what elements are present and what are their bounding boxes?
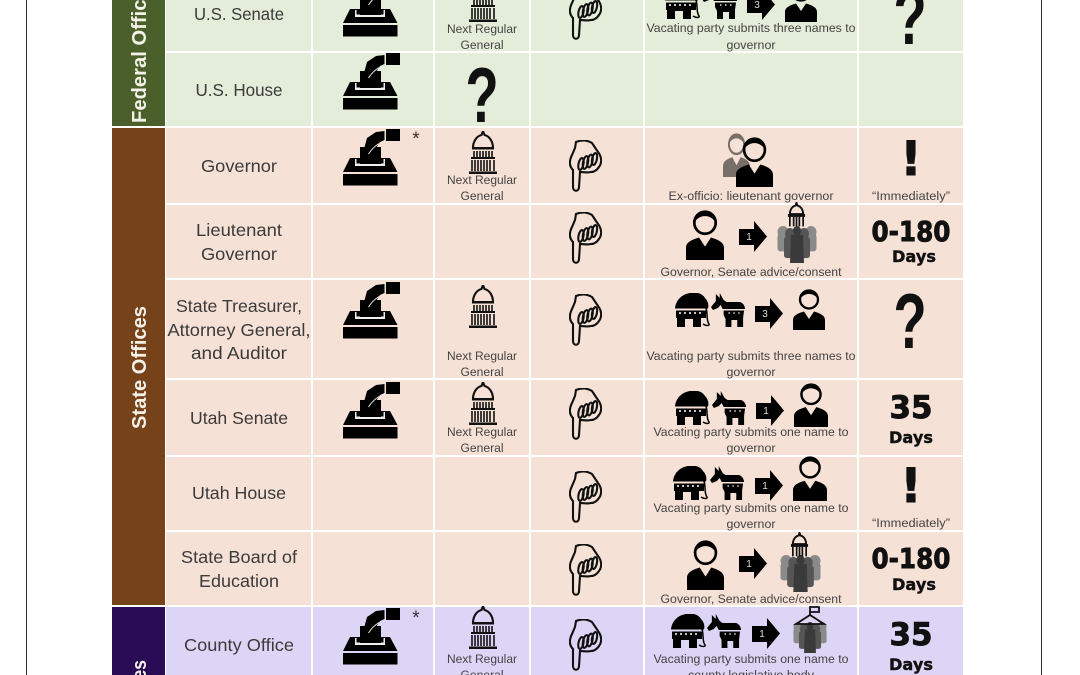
icon: elephant	[673, 466, 707, 500]
icon: elephant	[675, 293, 709, 327]
appointment note: Vacating party submits one name to	[654, 652, 849, 666]
icon: elephant	[675, 391, 709, 425]
office name	[168, 296, 310, 363]
timing: 0-180 days: Days	[892, 247, 936, 266]
icon: arrow 1	[755, 470, 783, 501]
icon: donkey	[702, 0, 737, 19]
icon: thumb down	[570, 213, 601, 263]
icon: capitol	[469, 606, 497, 649]
icon: arrow 1	[739, 221, 767, 252]
election label: General	[460, 189, 504, 203]
election label	[447, 173, 517, 203]
icon: ballot box	[343, 0, 400, 36]
timing: immediately: !	[900, 459, 922, 514]
icon: lieutenant behind governor	[723, 134, 773, 187]
icon: arrow 1	[752, 618, 780, 649]
office name: State Treasurer,	[176, 296, 302, 316]
office name: Utah House	[192, 483, 286, 503]
timing: 35 days	[889, 617, 933, 674]
office name: U.S. House	[196, 80, 282, 100]
row: State Treasurer, Attorney General, and Auditor	[166, 278, 963, 379]
icon: ballot box	[343, 608, 400, 664]
icon: arrow 1: 1	[762, 481, 768, 492]
election timing unknown: ?	[465, 52, 499, 139]
icon: thumb down	[570, 472, 601, 522]
appointment note: Vacating party submits three names to	[646, 21, 856, 35]
icon: capitol	[469, 382, 497, 425]
election label: Next Regular	[447, 425, 517, 439]
election label: Next Regular	[447, 652, 517, 666]
timing: immediately: “Immediately”	[872, 516, 950, 530]
row: Utah House	[166, 457, 963, 531]
row: State Board of Education	[166, 532, 963, 606]
timing: 35 days	[889, 390, 933, 447]
icon: thumb down	[570, 0, 601, 39]
icon: arrow 1	[739, 548, 767, 579]
timing: 0-180 days	[872, 542, 950, 594]
state sidebar heading: State Offices	[129, 306, 151, 429]
timing: immediately: !	[900, 132, 922, 187]
election label: Next Regular	[447, 22, 517, 36]
row: Utah Senate	[166, 380, 963, 455]
timing: immediately	[872, 132, 950, 203]
icon: senate crowd	[781, 533, 820, 592]
timing: 35 days: Days	[889, 655, 933, 674]
icon: arrow 3: 3	[762, 309, 768, 320]
icon: thumb down	[570, 620, 601, 670]
row: U.S. House	[166, 52, 963, 139]
icon: donkey	[707, 614, 741, 648]
icon: donkey	[710, 466, 744, 500]
office name: Utah Senate	[190, 408, 288, 428]
icon: capitol	[469, 131, 497, 174]
office name: and Auditor	[191, 343, 287, 363]
row: U.S. Senate	[166, 0, 963, 61]
office name: Lieutenant	[196, 220, 282, 240]
office name: Governor	[201, 156, 277, 176]
election label: Next Regular	[447, 173, 517, 187]
icon: governor	[687, 541, 724, 590]
timing: 35 days: 35	[890, 390, 932, 426]
icon: arrow 3	[755, 298, 783, 329]
timing: 35 days: Days	[889, 428, 933, 447]
election label	[447, 349, 517, 379]
election label: General	[460, 38, 504, 52]
icon: arrow 1: 1	[759, 629, 765, 640]
office name: Education	[199, 571, 279, 591]
appointment note	[654, 652, 849, 675]
appointment note: governor	[726, 38, 776, 52]
panel: federal offices	[112, 0, 963, 139]
state sidebar	[112, 128, 165, 605]
timing: 0-180 days: 0-180	[872, 542, 950, 575]
asterisk: *	[412, 608, 420, 629]
icon: arrow 1: 1	[746, 559, 752, 570]
election label	[447, 652, 517, 675]
icon: capitol	[469, 0, 497, 22]
office name	[181, 547, 297, 591]
timing: immediately: “Immediately”	[872, 189, 950, 203]
icon: county legislative body	[793, 607, 827, 653]
icon: donkey	[712, 391, 746, 425]
icon: ballot box	[343, 129, 400, 186]
appointment note: governor	[726, 517, 776, 531]
icon: senate crowd	[778, 203, 816, 263]
icon: ballot box	[343, 53, 400, 110]
timing: unknown: ?	[893, 278, 927, 365]
timing: 0-180 days: 0-180	[872, 215, 950, 248]
row: Lieutenant Governor	[166, 203, 963, 279]
office name	[196, 220, 282, 264]
icon: arrow 3: 3	[754, 0, 760, 11]
right page border	[1041, 0, 1042, 675]
timing: 35 days: 35	[890, 617, 932, 653]
appointment note	[654, 425, 849, 455]
office name: Attorney General,	[168, 320, 310, 340]
office name: U.S. Senate	[194, 4, 284, 24]
election label	[447, 425, 517, 455]
asterisk: *	[412, 129, 420, 150]
icon: ballot box	[343, 382, 400, 438]
election label: General	[460, 365, 504, 379]
icon: thumb down	[570, 141, 601, 191]
icon: elephant	[665, 0, 699, 19]
icon: arrow 3	[747, 0, 775, 20]
icon: governor	[793, 457, 827, 501]
icon: arrow 1: 1	[763, 406, 769, 417]
icon: governor	[785, 0, 817, 22]
appointment note: governor	[726, 365, 776, 379]
appointment note: governor	[726, 441, 776, 455]
appointment note: Vacating party submits one name to	[654, 425, 849, 439]
icon: elephant	[671, 614, 705, 648]
timing: immediately	[872, 459, 950, 530]
panel: local offices	[112, 606, 963, 675]
left page border	[26, 0, 27, 675]
office name: County Office	[184, 635, 294, 655]
row: County Office	[166, 606, 963, 675]
icon: thumb down	[570, 295, 601, 345]
icon: governor	[686, 211, 724, 260]
appointment note: Governor, Senate advice/consent	[660, 265, 842, 279]
icon: arrow 1	[756, 395, 784, 426]
timing: 0-180 days: Days	[892, 575, 936, 594]
election label	[447, 22, 517, 52]
icon: ballot box	[343, 282, 400, 338]
appointment note: Vacating party submits three names to	[646, 349, 856, 363]
icon: donkey	[711, 293, 745, 327]
appointment note	[646, 21, 856, 52]
appointment note	[646, 349, 856, 379]
federal sidebar	[112, 0, 165, 126]
appointment note: Governor, Senate advice/consent	[660, 592, 842, 606]
local sidebar	[112, 607, 165, 675]
row: Governor	[166, 128, 963, 203]
appointment note: Vacating party submits one name to	[654, 501, 849, 515]
appointment note	[654, 501, 849, 531]
timing: 0-180 days	[872, 215, 950, 266]
icon: thumb down	[570, 389, 601, 439]
election label: Next Regular	[447, 349, 517, 363]
appointment note: Ex-officio: lieutenant governor	[668, 189, 834, 203]
office name: State Board of	[181, 547, 297, 567]
icon: thumb down	[570, 545, 601, 595]
icon: governor	[794, 384, 828, 427]
panel: state offices	[112, 128, 963, 606]
office name: Governor	[201, 244, 277, 264]
election label: General	[460, 441, 504, 455]
icon: capitol	[469, 285, 497, 328]
icon: governor	[793, 290, 825, 330]
icon: arrow 1: 1	[746, 232, 752, 243]
